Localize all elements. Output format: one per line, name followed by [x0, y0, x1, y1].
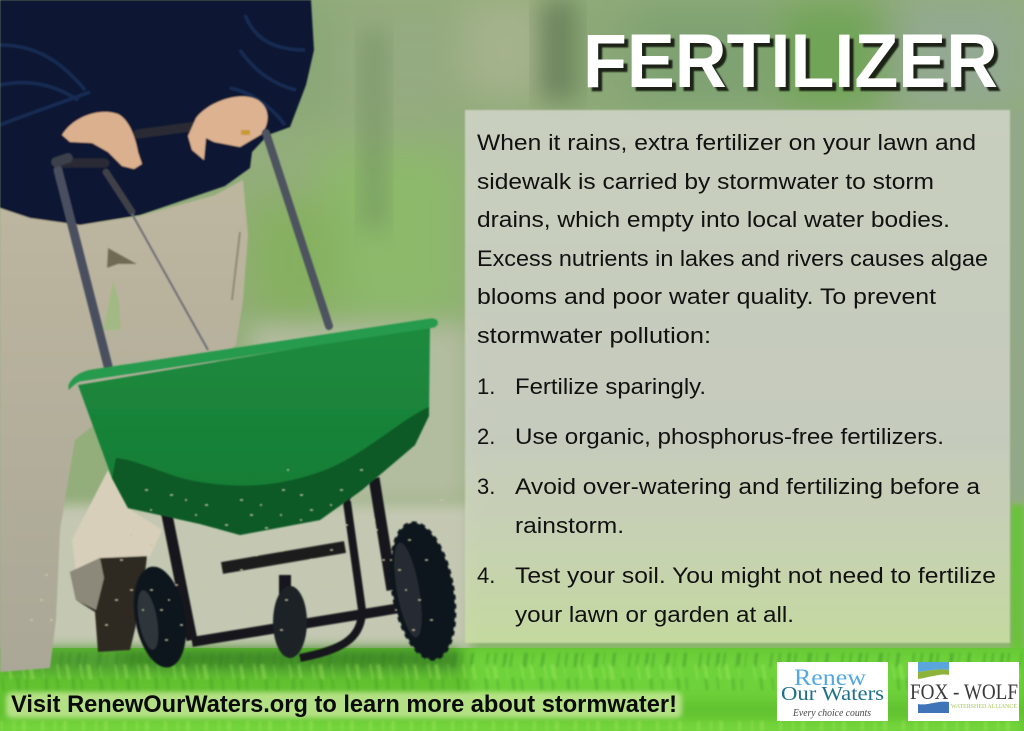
panel: semi-transparent text box — [465, 110, 1010, 643]
sleeve folds — [0, 15, 305, 125]
left wheel — [127, 562, 193, 672]
gap between the legs — [103, 280, 121, 330]
logo: Renew Our Waters: Every choice counts — [792, 708, 871, 719]
spreader frame and wheels — [127, 478, 465, 672]
right wheel — [381, 518, 465, 664]
handle grip — [60, 125, 205, 163]
body paragraph: stormwater pollution: — [477, 323, 711, 348]
boot — [70, 556, 147, 652]
sweater — [0, 0, 314, 225]
body paragraph: blooms and poor water quality. To prevent — [477, 284, 936, 309]
faint grass seen through panel — [470, 562, 1008, 638]
logo: Fox-Wolf Watershed Alliance: WATERSHED ALLIANCE — [951, 704, 1017, 710]
list of tips: 2. — [477, 424, 495, 449]
title: FERTILIZER — [583, 19, 998, 104]
grass lawn — [0, 648, 1024, 731]
list of tips — [477, 374, 996, 627]
logo: Fox-Wolf Watershed Alliance — [908, 662, 1019, 721]
list of tips: 3. — [477, 474, 495, 499]
list of tips: Avoid over-watering and fertilizing before a — [515, 474, 981, 499]
body paragraph: When it rains, extra fertilizer on your lawn and — [477, 130, 976, 155]
list of tips: 1. — [477, 374, 495, 399]
list of tips: Test your soil. You might not need to fertilize — [515, 563, 996, 588]
logo: Renew Our Waters: Renew — [794, 665, 866, 690]
person: gardener — [0, 0, 314, 672]
list of tips: Fertilize sparingly. — [515, 374, 706, 399]
list of tips: your lawn or garden at all. — [515, 602, 794, 627]
body paragraph: drains, which empty into local water bodies. — [477, 207, 950, 232]
body paragraph: Excess nutrients in lakes and rivers causes algae — [477, 246, 988, 271]
spreader hopper — [69, 319, 437, 535]
spreader handle — [56, 133, 329, 366]
knee of rear leg — [72, 470, 162, 580]
footer call to action: Visit RenewOurWaters.org to learn more about stormwater! — [11, 691, 677, 718]
title: FERTILIZER — [587, 23, 1002, 108]
list of tips: 4. — [477, 563, 495, 588]
right hand — [188, 96, 268, 160]
ring — [241, 130, 250, 135]
trousers — [0, 180, 248, 672]
fertilizer inside hopper — [112, 407, 429, 535]
logo: Renew Our Waters — [777, 662, 888, 721]
hopper rim — [69, 319, 437, 389]
logo: Renew Our Waters: Our Waters — [781, 683, 884, 705]
body paragraph — [477, 130, 988, 348]
left hand — [62, 112, 142, 169]
list of tips: rainstorm. — [515, 513, 624, 538]
trouser creases — [107, 248, 137, 268]
body paragraph: sidewalk is carried by stormwater to storm — [477, 169, 934, 194]
list of tips: Use organic, phosphorus-free fertilizers. — [515, 424, 944, 449]
fertilizer granules — [30, 470, 458, 640]
